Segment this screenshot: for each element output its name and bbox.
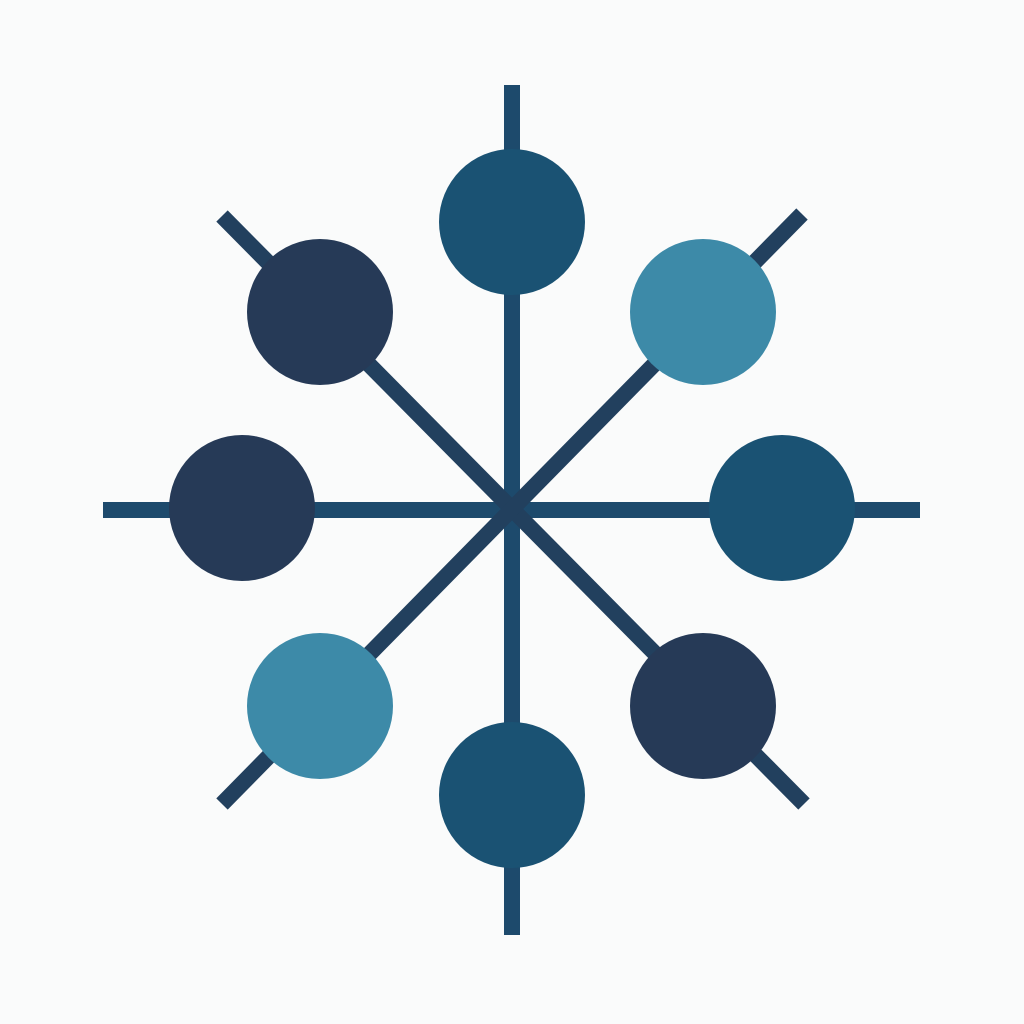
- circles: [169, 149, 855, 868]
- spokes: [103, 85, 920, 935]
